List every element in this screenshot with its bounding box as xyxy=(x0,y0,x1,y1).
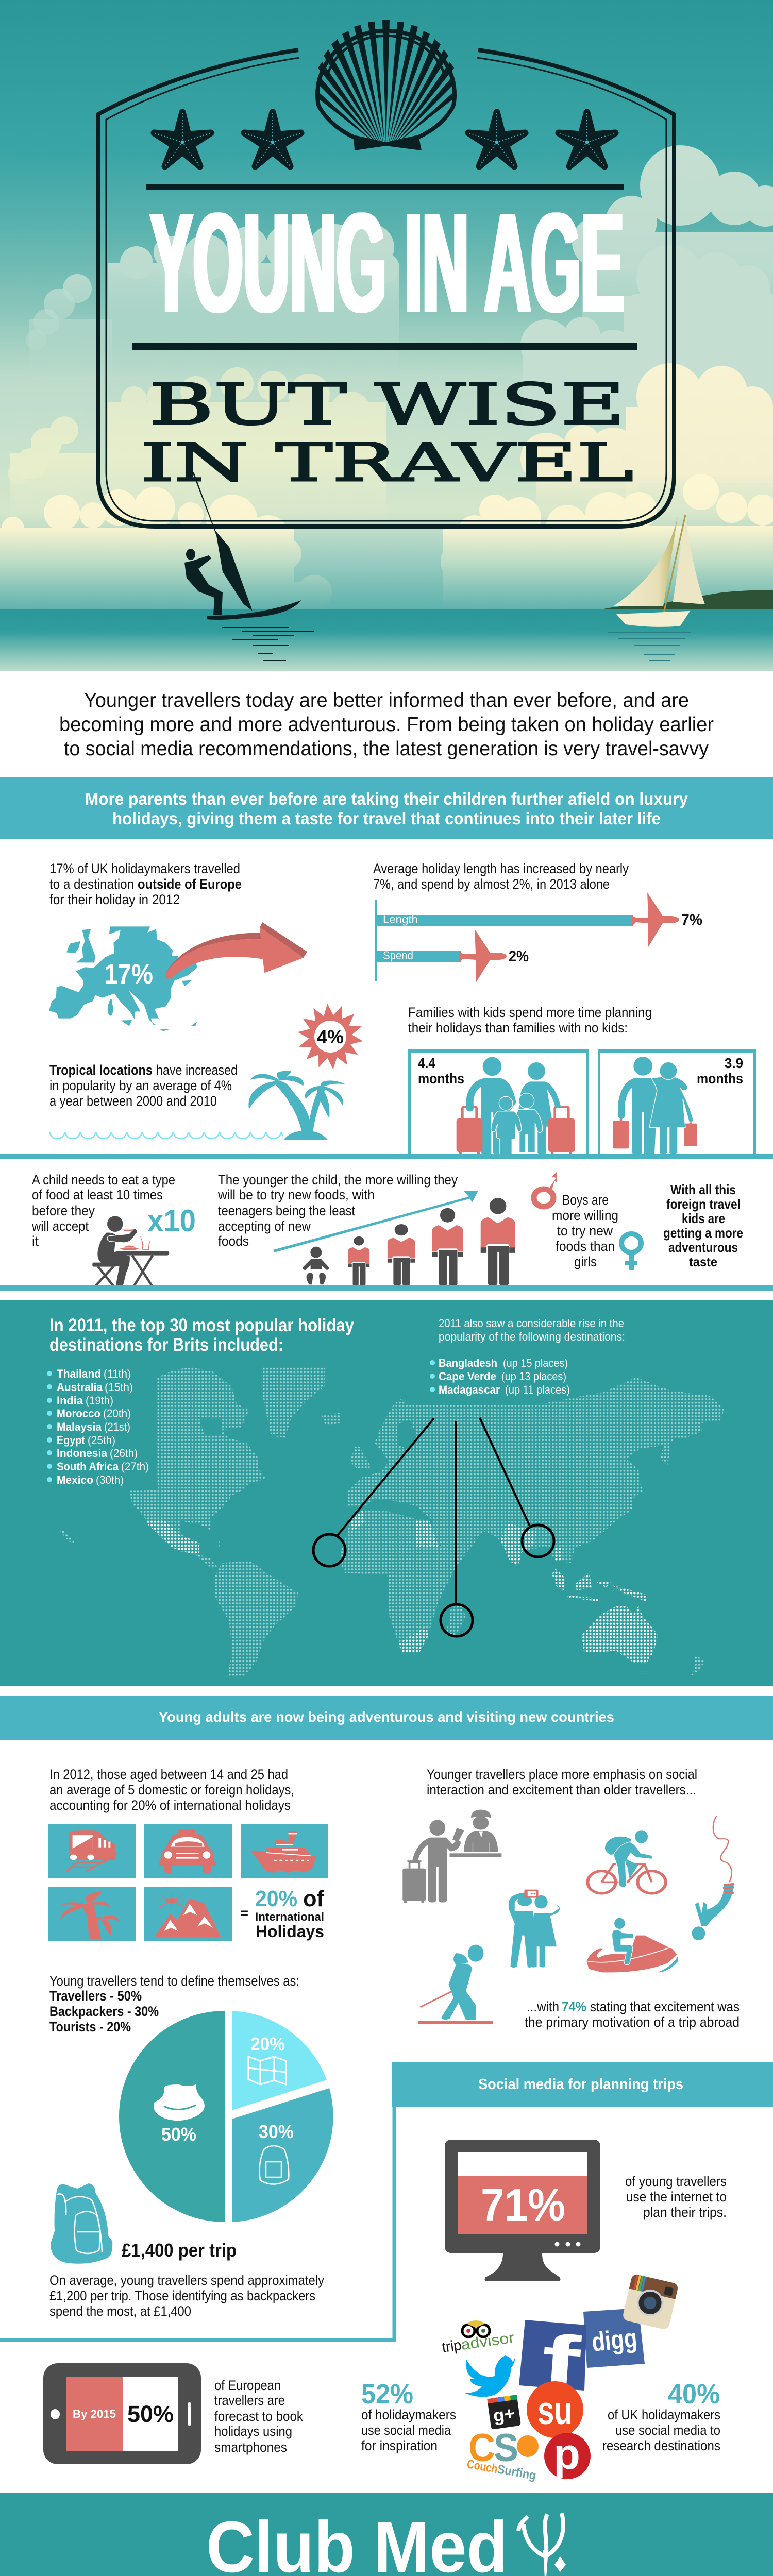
bar: spend xyxy=(376,929,529,983)
icons: travellers activities xyxy=(402,1810,734,1972)
icon: starfish xyxy=(468,112,525,166)
text: holiday length: Average holiday length has increased by nearly xyxy=(373,861,629,876)
sea xyxy=(0,609,773,671)
text: child needs ten tries: of food at least 10 times xyxy=(32,1187,163,1202)
banner: young adults: Young adults are now being adventurous and visiting new countries xyxy=(159,1709,614,1725)
dotted world map xyxy=(52,1360,742,1682)
stat: 52% inspiration xyxy=(361,2379,456,2453)
text: considerable rise: popularity of the following destinations: xyxy=(439,1330,625,1343)
text: younger child: The younger the child, the more willing they xyxy=(218,1172,458,1188)
logo: google plus: g+ xyxy=(492,2403,516,2426)
stat: 40% research: use social media to xyxy=(615,2422,720,2438)
text: smartphones: smartphones xyxy=(214,2439,287,2455)
text: five holidays: accounting for 20% of international holidays xyxy=(49,1798,291,1813)
list: rising destinations: (up 13 places) xyxy=(501,1370,566,1383)
text: 74% excitement: 74% xyxy=(562,1999,586,2014)
list: rising destinations: Bangladesh xyxy=(439,1357,497,1369)
intro text xyxy=(59,689,714,760)
panel: families with kids xyxy=(408,1049,589,1154)
icon: backpack xyxy=(51,2183,112,2264)
logo: facebook xyxy=(519,2319,586,2405)
text: boys more willing: girls xyxy=(574,1254,597,1269)
list: top destinations: Indonesia xyxy=(57,1447,108,1460)
children growing by age xyxy=(303,1198,515,1285)
hero panel xyxy=(0,0,773,671)
text: use the internet: of young travellers xyxy=(625,2174,727,2189)
list: top destinations: Morocco xyxy=(57,1407,100,1420)
text: outside europe: 17% of UK holidaymakers travelled xyxy=(49,861,240,876)
heading: top 30 destinations: destinations for Brits included: xyxy=(49,1335,283,1355)
icon: sun 4%: 4% xyxy=(317,1026,344,1047)
text: smartphones: forecast to book xyxy=(214,2409,303,2424)
text: younger child xyxy=(217,1172,458,1249)
icon: female symbol xyxy=(621,1234,641,1270)
text: five holidays: an average of 5 domestic or foreign holidays, xyxy=(49,1782,294,1798)
list: top destinations: Egypt xyxy=(57,1434,86,1447)
text: adventurous taste: foreign travel xyxy=(666,1196,741,1212)
text: smartphones: of European xyxy=(214,2378,281,2393)
text: families xyxy=(408,1005,652,1036)
text: boys more willing xyxy=(552,1192,618,1269)
logo: digg xyxy=(583,2308,645,2368)
text: younger child: foods xyxy=(218,1233,249,1249)
text: average spend: £1,200 per trip. Those identifying as backpackers xyxy=(49,2288,315,2303)
icon: monitor 71%: 71% xyxy=(481,2179,565,2230)
text: families: their holidays than families with no kids: xyxy=(408,1020,628,1036)
stat: 52% inspiration: for inspiration xyxy=(361,2438,438,2453)
panel: families with no kids: months xyxy=(697,1071,743,1087)
arrow: out of europe xyxy=(165,922,307,978)
icon: passenger at check-in xyxy=(402,1810,501,1903)
list: top destinations: Thailand xyxy=(57,1367,101,1380)
logo: instagram xyxy=(622,2274,679,2330)
list: rising destinations: Cape Verde xyxy=(439,1370,496,1383)
slice: tourists 20%: 20% xyxy=(250,2033,285,2055)
text: boys more willing: more willing xyxy=(552,1208,618,1223)
icon: jet ski xyxy=(586,1918,678,1972)
list: top destinations: Australia xyxy=(57,1381,103,1394)
text: child needs ten tries: before they xyxy=(32,1203,95,1218)
right cream cloud xyxy=(520,363,773,520)
logo: couchsurfing: Surfing xyxy=(496,2462,537,2483)
text: traveller types xyxy=(49,1973,299,2035)
bar: spend: 2% xyxy=(509,948,529,965)
callout: bangladesh xyxy=(480,1418,554,1557)
text: smartphones xyxy=(214,2378,303,2455)
text: use the internet xyxy=(625,2174,727,2220)
text: adventurous taste: kids are xyxy=(682,1211,725,1226)
text: adventurous taste: getting a more xyxy=(663,1225,743,1241)
title: but wise: BUT WISE xyxy=(149,371,625,437)
windsurfer silhouette xyxy=(184,472,314,660)
list: top destinations: (11th) xyxy=(104,1367,131,1380)
heading: top 30 destinations: In 2011, the top 30 most popular holiday xyxy=(49,1315,354,1335)
frame xyxy=(98,50,674,527)
panel: families with no kids: 3.9 xyxy=(725,1055,743,1071)
callout: madagascar xyxy=(441,1421,473,1636)
stat: 20% of international holidays: = xyxy=(240,1905,248,1921)
list: top destinations: (20th) xyxy=(103,1407,131,1420)
stat: 52% inspiration: use social media xyxy=(361,2422,451,2438)
list: rising destinations: (up 11 places) xyxy=(505,1383,570,1396)
list: top destinations: (25th) xyxy=(88,1434,115,1447)
icon: taxi xyxy=(144,1824,232,1878)
icon: smartphone 50%: 50% xyxy=(127,2401,174,2427)
icon: palms xyxy=(48,1887,136,1941)
stat: 20% of international holidays: 20% xyxy=(255,1886,297,1911)
text: average spend: spend the most, at £1,400 xyxy=(49,2303,191,2319)
text: child needs ten tries: it xyxy=(32,1233,39,1249)
icon: couple taking photo xyxy=(509,1890,560,1968)
bar: spend: Spend xyxy=(383,949,413,962)
panel: world map xyxy=(0,1300,773,1686)
list: rising destinations: (up 15 places) xyxy=(503,1357,568,1369)
icon: male symbol xyxy=(534,1172,557,1207)
stat: 52% inspiration: 52% xyxy=(361,2379,413,2410)
europe percentage: 17% xyxy=(104,959,153,990)
text: 1,400 per trip: £1,400 per trip xyxy=(122,2240,237,2261)
list: top destinations: India xyxy=(57,1394,83,1407)
text: adventurous taste: With all this xyxy=(670,1182,736,1197)
list: top destinations: (19th) xyxy=(86,1394,113,1407)
text: considerable rise: 2011 also saw a considerable rise in the xyxy=(439,1317,624,1330)
icon: toddler xyxy=(348,1236,369,1285)
text: outside europe xyxy=(49,861,242,907)
logo: couchsurfing: Couch xyxy=(466,2457,499,2476)
panel: families with kids: months xyxy=(418,1071,464,1087)
panel: footer xyxy=(0,2493,773,2576)
icon: teenager xyxy=(481,1198,515,1285)
icon: mountains xyxy=(144,1887,232,1941)
logo: pinterest: p xyxy=(553,2430,580,2478)
icon: starfish xyxy=(559,112,615,166)
text: boys more willing: Boys are xyxy=(562,1192,609,1208)
banner: parents: More parents than ever before are taking their children further afield on luxury xyxy=(85,789,688,808)
text: child needs ten tries: A child needs to eat a type xyxy=(32,1172,175,1188)
text: 74% excitement: stating that excitement was xyxy=(590,1999,740,2014)
x10 figure: x10 xyxy=(147,1204,196,1238)
arrow: growth by age xyxy=(273,1191,478,1252)
icon: cruise ship xyxy=(241,1824,328,1878)
text: 74% excitement: the primary motivation of a trip abroad xyxy=(525,2014,740,2030)
text: boys more willing: to try new xyxy=(557,1223,613,1239)
text: younger child: will be to try new foods, with xyxy=(217,1187,375,1202)
bar: length: Length xyxy=(383,913,418,926)
logo: facebook: f xyxy=(539,2319,583,2405)
banner: young adults xyxy=(0,1696,773,1740)
text: 74% excitement: ...with xyxy=(527,1999,559,2014)
stat: 40% research: research destinations xyxy=(602,2438,720,2453)
stat: 20% of international holidays: Holidays xyxy=(256,1922,324,1941)
text: five holidays xyxy=(49,1767,294,1813)
icon: family with suitcases xyxy=(457,1057,575,1154)
stat: 20% of international holidays xyxy=(240,1886,324,1941)
stat: 52% inspiration: of holidaymakers xyxy=(361,2407,456,2422)
social media logos xyxy=(441,2274,679,2483)
list: top destinations: Malaysia xyxy=(57,1420,102,1433)
text: traveller types: Tourists - 20% xyxy=(49,2019,131,2035)
text: tropical locations: Tropical locations xyxy=(49,1062,153,1078)
text: younger travellers: Younger travellers place more emphasis on social xyxy=(427,1767,697,1782)
text: adventurous taste: adventurous xyxy=(668,1240,738,1255)
text: younger child: accepting of new xyxy=(218,1218,311,1234)
text: tropical locations: have increased xyxy=(156,1062,238,1078)
text: traveller types: Young travellers tend to define themselves as: xyxy=(49,1973,299,1989)
logo: couchsurfing xyxy=(466,2426,539,2483)
callout: cape verde xyxy=(313,1418,434,1566)
icon: palm island xyxy=(49,1071,346,1140)
intro text: to social media recommendations, the latest generation is very travel-savvy xyxy=(64,738,709,760)
text: tropical locations xyxy=(49,1062,238,1109)
text: considerable rise xyxy=(439,1317,625,1343)
list: top destinations: (30th) xyxy=(96,1473,124,1486)
heading: top 30 destinations xyxy=(49,1315,354,1355)
logo: pinterest xyxy=(544,2430,591,2479)
icon: cyclist xyxy=(587,1830,666,1893)
text: tropical locations: a year between 2000 and 2010 xyxy=(49,1093,217,1109)
icon: smartphone 50%: By 2015 xyxy=(73,2408,116,2420)
panel: social media for planning trips: Social media for planning trips xyxy=(478,2076,683,2093)
text: smartphones: travellers are xyxy=(214,2393,285,2408)
icon: scallop shell xyxy=(316,20,456,150)
icon: monitor 71% xyxy=(445,2140,600,2281)
text: child needs ten tries xyxy=(31,1172,175,1249)
icon: older child xyxy=(432,1208,463,1285)
text: younger travellers xyxy=(427,1767,697,1798)
bar chart: length and spend xyxy=(375,892,702,983)
text: younger child: teenagers being the least xyxy=(218,1203,355,1218)
bar: length: 7% xyxy=(681,911,702,928)
text: five holidays: In 2012, those aged between 14 and 25 had xyxy=(49,1767,288,1782)
list: top destinations: (15th) xyxy=(105,1381,133,1394)
cream clouds xyxy=(8,367,386,520)
slice: travellers 50%: 50% xyxy=(161,2124,196,2145)
text: boys more willing: foods than xyxy=(556,1239,615,1254)
text: use the internet: use the internet to xyxy=(626,2189,727,2205)
text: adventurous taste: taste xyxy=(689,1254,717,1269)
panel: social media for planning trips xyxy=(0,2062,773,2340)
intro text: Younger travellers today are better informed than ever before, and are xyxy=(84,689,689,711)
logo: tripadvisor xyxy=(441,2320,515,2356)
logo: couchsurfing: S xyxy=(494,2426,518,2470)
icon: starfish xyxy=(244,112,301,166)
icon: child xyxy=(388,1224,415,1285)
logo: twitter xyxy=(465,2355,515,2397)
icon: starfish xyxy=(154,112,211,166)
text: average spend: On average, young travellers spend approximately xyxy=(49,2273,324,2288)
icon: bungee jumper xyxy=(692,1816,734,1940)
text: holiday length: 7%, and spend by almost 2%, in 2013 alone xyxy=(373,876,610,892)
text: use the internet: plan their trips. xyxy=(643,2205,727,2220)
text: traveller types: Backpackers - 30% xyxy=(49,2004,159,2019)
icon: child at table xyxy=(92,1216,169,1286)
logo: tripadvisor: advisor xyxy=(460,2330,515,2353)
stat: 40% research: of UK holidaymakers xyxy=(608,2407,720,2422)
text: younger travellers: interaction and excitement than older travellers... xyxy=(427,1782,696,1798)
stat: 20% of international holidays: of xyxy=(303,1886,324,1911)
list: top destinations: (26th) xyxy=(110,1447,138,1460)
text: traveller types: Travellers - 50% xyxy=(49,1988,142,2004)
sailboat xyxy=(608,515,705,660)
logo: stumbleupon xyxy=(527,2381,583,2438)
text: families: Families with kids spend more time planning xyxy=(408,1005,652,1020)
slice: tourists 20% xyxy=(232,2011,327,2110)
icon: couple with suitcases xyxy=(613,1057,697,1154)
text: holiday length xyxy=(373,861,629,892)
banner: parents: holidays, giving them a taste for travel that continues into their later life xyxy=(112,809,661,828)
list: top destinations: (21st) xyxy=(104,1420,130,1433)
list: rising destinations xyxy=(430,1357,570,1396)
icon: sun 4% xyxy=(295,1001,365,1072)
list: rising destinations: Madagascar xyxy=(439,1383,500,1396)
slice: travellers 50% xyxy=(119,2011,225,2222)
text: 74% excitement xyxy=(525,1999,740,2030)
icon: train xyxy=(48,1824,136,1878)
icon: smartphone 50% xyxy=(43,2363,201,2464)
slice: backpackers 30% xyxy=(232,2088,333,2222)
text: average spend xyxy=(49,2273,324,2319)
pie chart: traveller types xyxy=(119,2011,333,2222)
text: smartphones: holidays using xyxy=(214,2424,292,2439)
text: tropical locations: in popularity by an average of 4% xyxy=(49,1078,232,1093)
logo: couchsurfing: C xyxy=(468,2426,495,2470)
logo: tripadvisor: trip xyxy=(441,2337,463,2356)
logo: digg: digg xyxy=(591,2323,638,2358)
text: child needs ten tries: will accept xyxy=(31,1218,89,1234)
title: in travel: IN TRAVEL xyxy=(141,432,633,494)
far clouds xyxy=(26,145,773,397)
logo: google plus xyxy=(487,2395,521,2430)
bar: length xyxy=(376,892,702,947)
text: outside europe: for their holiday in 2012 xyxy=(49,892,180,907)
intro text: becoming more and more adventurous. From being taken on holiday earlier xyxy=(59,714,714,736)
stat: 40% research xyxy=(602,2379,720,2453)
island xyxy=(601,590,773,609)
panel: families with kids: 4.4 xyxy=(418,1055,435,1071)
icon: skier xyxy=(418,1945,493,2024)
panel: families with no kids xyxy=(598,1049,756,1154)
icon: baby xyxy=(303,1247,329,1284)
logo: stumbleupon: su xyxy=(537,2389,573,2433)
list: top destinations xyxy=(47,1367,149,1486)
mid clouds xyxy=(520,245,773,466)
europe map xyxy=(49,926,197,1031)
list: top destinations: South Africa xyxy=(57,1460,119,1473)
list: top destinations: Mexico xyxy=(57,1473,93,1486)
text: outside europe: outside of Europe xyxy=(138,876,242,892)
foreground clouds xyxy=(0,474,773,610)
stat: 40% research: 40% xyxy=(668,2379,720,2410)
text: adventurous taste xyxy=(663,1182,743,1269)
text: outside europe: to a destination xyxy=(49,876,134,892)
list: top destinations: (27th) xyxy=(121,1460,149,1473)
banner: parents xyxy=(0,777,773,839)
stat: 20% of international holidays: International xyxy=(255,1910,324,1923)
sea waves xyxy=(49,1132,283,1140)
slice: backpackers 30%: 30% xyxy=(259,2121,294,2142)
